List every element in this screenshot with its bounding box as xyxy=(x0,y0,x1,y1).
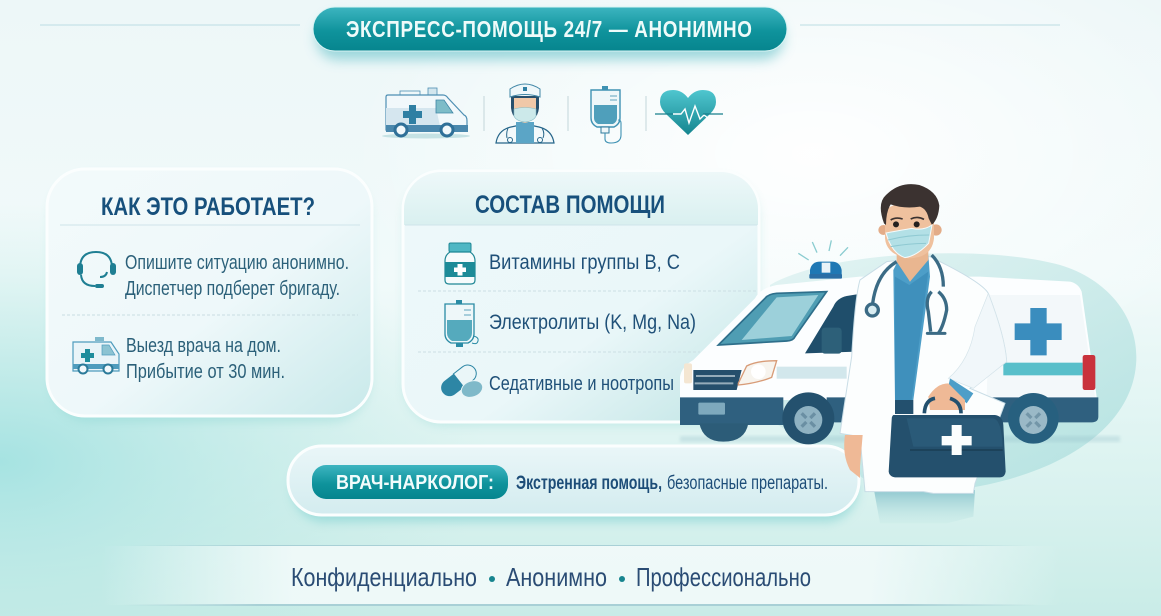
panel: composition of care xyxy=(403,171,759,426)
icon: heart pulse xyxy=(655,90,723,135)
heading: composition: СОСТАВ ПОМОЩИ xyxy=(475,191,665,219)
footer text xyxy=(291,562,811,592)
neck xyxy=(897,248,928,282)
decorative blob behind ambulance xyxy=(770,253,1136,492)
face xyxy=(885,203,934,258)
icon: vitamin bottle xyxy=(445,243,475,284)
icon: small ambulance xyxy=(73,337,119,374)
text: electrolytes: Электролиты (K, Mg, Na) xyxy=(489,311,696,334)
label pill: ВРАЧ-НАРКОЛОГ: xyxy=(336,472,494,494)
cuff and hand on handle xyxy=(948,378,973,403)
footer text: Конфиденциально xyxy=(291,562,477,592)
siren with rays xyxy=(798,240,848,279)
shirt xyxy=(893,255,930,400)
text: vitamins: Витамины группы B, C xyxy=(489,251,680,274)
medical bag xyxy=(889,398,1006,477)
icon row xyxy=(382,84,723,143)
text: step one xyxy=(125,252,349,300)
callout text xyxy=(516,473,828,494)
footer band xyxy=(100,545,1061,606)
icon: capsules xyxy=(438,362,485,400)
face mask xyxy=(886,225,932,258)
header banner: ЭКСПРЕСС-ПОМОЩЬ 24/7 — АНОНИМНО xyxy=(346,17,752,42)
footer text: Анонимно xyxy=(506,562,607,592)
ambulance xyxy=(680,240,1098,444)
hand overlapping callout xyxy=(844,435,860,478)
panel: how it works xyxy=(47,169,372,422)
label pill xyxy=(312,465,508,499)
footer text: Профессионально xyxy=(636,562,811,592)
icon: medic xyxy=(496,84,554,143)
text: step two: Прибытие от 30 мин. xyxy=(126,361,285,383)
text: step one: Опишите ситуацию анонимно. xyxy=(125,252,349,274)
hand on coat side xyxy=(845,435,863,469)
heading: how it works: КАК ЭТО РАБОТАЕТ? xyxy=(101,193,315,221)
callout text: Экстренная помощь, xyxy=(516,473,662,494)
callout text: безопасные препараты. xyxy=(667,473,828,494)
coat xyxy=(840,257,1007,493)
icon: electrolyte bag xyxy=(445,300,478,347)
ground shadow xyxy=(680,436,1120,442)
text: sedatives: Седативные и ноотропы xyxy=(489,373,674,395)
illustration: ambulance and doctor xyxy=(680,184,1120,523)
header banner xyxy=(40,7,1060,60)
text: step two xyxy=(126,335,285,383)
stethoscope xyxy=(866,255,947,333)
icon: headset xyxy=(77,252,116,288)
hair xyxy=(881,184,939,225)
text: step one: Диспетчер подберет бригаду. xyxy=(125,278,340,300)
callout: narcologist xyxy=(288,446,859,522)
icon: IV bag xyxy=(591,86,621,143)
icon: ambulance xyxy=(382,88,470,138)
text: step two: Выезд врача на дом. xyxy=(126,335,281,357)
doctor xyxy=(840,184,1007,523)
head xyxy=(878,184,942,282)
legs xyxy=(874,490,975,523)
